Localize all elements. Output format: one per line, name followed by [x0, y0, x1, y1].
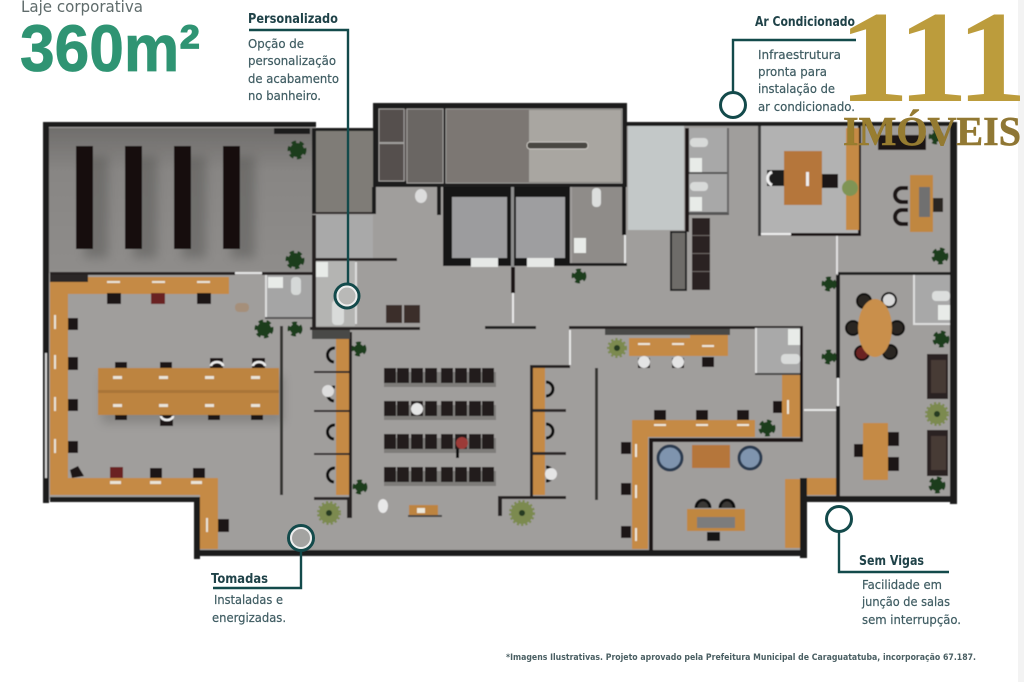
- callout: Ar Condicionado: [720, 15, 856, 118]
- callout marker: [288, 526, 314, 550]
- callout text: Instaladas e: [214, 593, 283, 607]
- callout text: no banheiro.: [248, 89, 321, 103]
- callout leader line: [213, 551, 301, 588]
- rooms: upper right: [628, 126, 950, 290]
- callout text: energizadas.: [212, 611, 286, 625]
- callout text: [248, 37, 339, 103]
- callout: Sem Vigas: [826, 506, 961, 627]
- callout text: sem interrupção.: [862, 613, 961, 627]
- area heading: 360m²: [20, 11, 200, 85]
- room: upper left storage: [49, 128, 313, 273]
- callout text: pronta para: [758, 65, 827, 79]
- outer walls: [43, 122, 957, 559]
- floor plan: [43, 103, 957, 559]
- cubicles: centre left: [310, 128, 420, 518]
- callout text: de acabamento: [248, 72, 339, 86]
- callout heading: Tomadas: [211, 572, 268, 587]
- callout text: [212, 593, 286, 625]
- callout: Personalizado: [248, 12, 359, 308]
- callout marker: [720, 92, 746, 118]
- lounge: [658, 445, 836, 548]
- callout heading: Sem Vigas: [859, 554, 924, 569]
- callout leader line: [839, 532, 949, 572]
- callout text: Infraestrutura: [758, 48, 841, 62]
- callout: Tomadas: [211, 526, 314, 625]
- floor slab: [45, 105, 955, 555]
- workstations: left office: [50, 272, 312, 549]
- callout heading: Personalizado: [248, 12, 338, 27]
- logo wordmark: IMÓVEIS: [843, 108, 1021, 154]
- callout text: [758, 48, 855, 114]
- callout leader line: [733, 40, 856, 93]
- callout text: instalação de: [758, 82, 835, 96]
- right wing offices: [804, 275, 950, 496]
- callout text: personalização: [248, 54, 336, 68]
- callout text: ar condicionado.: [758, 100, 855, 114]
- footnote: *Imagens Ilustrativas. Projeto aprovado pela Prefeitura Municipal de Caraguatatuba, incorporação 67.187.: [506, 653, 976, 663]
- rooms: central top and lift core: [316, 103, 627, 329]
- callout text: [861, 578, 961, 627]
- waiting seats: [378, 189, 496, 517]
- plants: [257, 132, 947, 524]
- callout text: Opção de: [248, 37, 304, 51]
- callout text: junção de salas: [861, 595, 950, 609]
- logo: 111 Imóveis: [839, 0, 1023, 154]
- callout marker: [826, 506, 852, 532]
- callout leader line: [249, 30, 348, 285]
- callout marker: [335, 284, 359, 308]
- callout heading: Ar Condicionado: [755, 15, 855, 30]
- callout text: Facilidade em: [862, 578, 942, 592]
- cubicles and workstations: centre right: [498, 326, 803, 553]
